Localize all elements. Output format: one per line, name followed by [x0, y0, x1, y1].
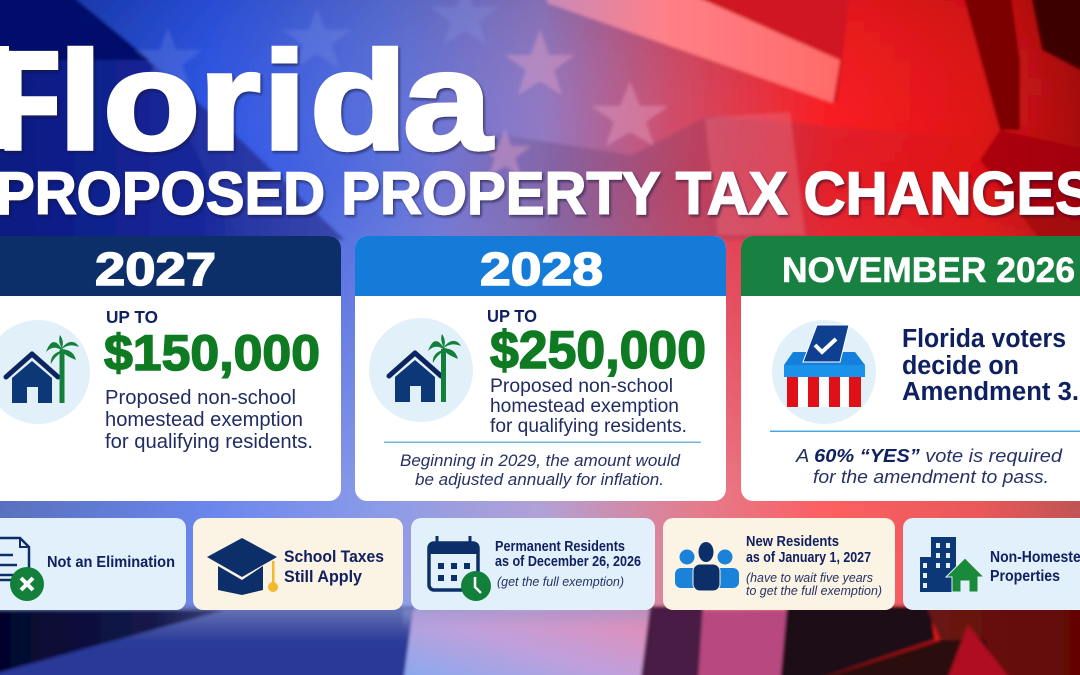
icon: calendar with clock: [429, 536, 491, 601]
text block: description: for qualifying residents.: [490, 415, 687, 437]
label: Permanent Residents: [495, 539, 625, 555]
panel: November 2026: [741, 236, 1080, 501]
panel: 2027: [0, 236, 341, 501]
label: [990, 549, 1080, 585]
label: up to: UP TO: [106, 307, 158, 327]
label: [284, 548, 384, 586]
icon: house and palm 2028: [369, 318, 473, 422]
label: up to: UP TO: [487, 306, 537, 326]
text block: voters decide: [902, 325, 1079, 406]
heading: 2027: 2027: [95, 243, 216, 295]
icon: people: [675, 542, 739, 591]
text block: description: Proposed non-school: [490, 375, 673, 397]
note: inflation adjustment: be adjusted annually for inflation.: [415, 470, 664, 489]
label: (get the full exemption): [497, 574, 624, 589]
label: Still Apply: [284, 568, 363, 586]
icon: document with x: [0, 538, 44, 601]
pill: not an elimination: [0, 518, 186, 610]
pill: school taxes: [193, 518, 403, 610]
text block: description: homestead exemption: [490, 395, 679, 417]
text block: description: for qualifying residents.: [105, 431, 313, 453]
panel: 2028: [355, 236, 726, 501]
pill: new residents: [663, 518, 895, 610]
title: Florida: F: [0, 23, 61, 179]
pill: permanent residents: [411, 518, 655, 610]
icon: graduation cap: [207, 538, 278, 595]
icon: ballot box: [772, 320, 876, 424]
icon: house and palm 2027: [0, 320, 90, 424]
label: as of December 26, 2026: [495, 554, 641, 570]
text block: description: [105, 387, 313, 453]
icon: buildings and house: [920, 537, 984, 592]
text block: description: [490, 375, 687, 437]
text block: description: homestead exemption: [105, 409, 303, 431]
text block: voters decide: Amendment 3.: [902, 378, 1079, 406]
label: [495, 539, 641, 589]
text block: voters decide: Florida voters: [902, 325, 1066, 353]
label: Properties: [990, 568, 1060, 585]
label: [746, 534, 882, 598]
note: inflation adjustment: Beginning in 2029, the amount would: [400, 451, 681, 470]
label: (have to wait five years: [746, 570, 873, 585]
heading: 2028: 2028: [480, 243, 603, 295]
pill: non-homestead properties: [903, 518, 1080, 610]
text block: voters decide: decide on: [902, 352, 1019, 380]
label: School Taxes: [284, 548, 384, 566]
text block: description: Proposed non-school: [105, 387, 296, 409]
label: Not an Elimination: [47, 554, 175, 571]
label: to get the full exemption): [746, 583, 882, 598]
note: 60 percent requirement: A 60% “YES” vote is required: [795, 445, 1063, 466]
title: Florida: lorida: [58, 22, 493, 179]
amount: 250,000: $250,000: [490, 321, 706, 380]
note: inflation adjustment: [400, 451, 681, 489]
note: 60 percent requirement: for the amendment to pass.: [813, 466, 1049, 487]
note: 60 percent requirement: [795, 445, 1063, 487]
label: as of January 1, 2027: [746, 550, 871, 566]
amount: 150,000: $150,000: [104, 325, 320, 381]
label: New Residents: [746, 534, 839, 550]
heading: November 2026: NOVEMBER 2026: [782, 251, 1075, 290]
